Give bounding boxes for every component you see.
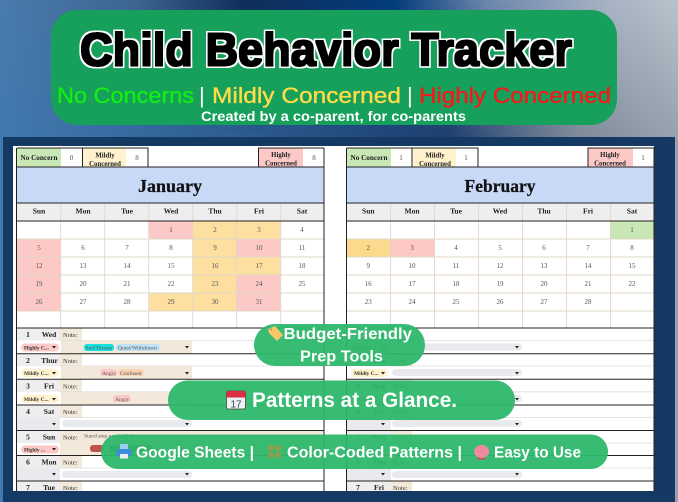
concern level legend: No Concerns [57, 83, 194, 108]
February daily log: 5 [356, 432, 360, 442]
January legend: No Concern [20, 155, 58, 162]
January daily log: Sun [43, 432, 56, 442]
subtitle: Created by a co-parent, for co-parents [201, 108, 466, 124]
icon: calendar [226, 391, 246, 410]
January legend: Mildly [95, 152, 115, 160]
February day grid: 7 [586, 244, 590, 252]
January legend: 8 [312, 154, 316, 162]
January weekday header [17, 203, 324, 221]
status chips: Mildly C... [354, 371, 379, 377]
January daily log: 1 [26, 330, 30, 339]
January legend [17, 148, 324, 168]
February daily log: Note: [393, 434, 408, 442]
January daily log: Mon [42, 458, 57, 466]
behavior tags: Angry [115, 397, 129, 403]
January day grid: 12 [36, 262, 43, 270]
status chips: Highly ... [24, 448, 46, 454]
February daily log: 6 [356, 458, 360, 466]
status chips: Mildly C... [354, 397, 379, 403]
February daily log: Note: [393, 460, 408, 466]
January day grid: 15 [168, 262, 175, 270]
January legend: 0 [70, 154, 74, 162]
callout text: Easy to Use [494, 444, 581, 462]
callout text [136, 444, 581, 462]
February day grid: 19 [496, 280, 504, 288]
February day grid [347, 203, 654, 328]
February daily log: Sun [373, 356, 386, 365]
February day grid: 3 [410, 244, 414, 252]
January day grid: 24 [256, 280, 263, 288]
January day grid: 13 [80, 262, 87, 270]
January day grid: 28 [124, 298, 131, 306]
January day grid: 19 [36, 280, 43, 288]
January day grid: 26 [36, 298, 43, 306]
February legend: Concerned [419, 161, 451, 168]
February day grid: 21 [584, 280, 592, 288]
January day grid: 25 [298, 280, 306, 288]
January day grid: 23 [212, 280, 219, 288]
February daily log: Sat [374, 330, 385, 339]
January day grid: 3 [257, 226, 261, 234]
January heading [17, 167, 324, 203]
January day grid: 7 [125, 244, 129, 252]
February weekday header: Wed [493, 206, 508, 216]
January daily log: Note: [63, 384, 78, 390]
callout: patterns at a glance [168, 380, 515, 420]
January weekday header: Tue [121, 206, 134, 216]
January day grid: 18 [298, 262, 306, 270]
icon: printer [116, 444, 132, 458]
February daily log: Note: [393, 485, 408, 492]
February daily log: 7 [356, 483, 360, 492]
January daily log: Note: [63, 358, 78, 365]
January day grid: 22 [168, 280, 175, 288]
status chips: Mildly C... [24, 397, 49, 403]
January daily log: 7 [26, 483, 30, 492]
panel: January calendar [16, 148, 324, 492]
January daily log: 2 [26, 356, 30, 365]
January legend: Concerned [265, 160, 297, 168]
February weekday header: Sun [362, 206, 375, 216]
January day grid: 17 [256, 262, 263, 270]
January day grid: 29 [168, 298, 175, 306]
status chips: Highly C... [24, 346, 50, 352]
February legend [346, 148, 654, 168]
February daily log: 3 [356, 382, 360, 390]
behavior tags: Quiet/Withdrawn [118, 346, 157, 352]
February day grid: 8 [630, 244, 634, 252]
January daily log [17, 328, 324, 492]
February legend: 1 [464, 154, 468, 162]
title banner [51, 10, 617, 125]
February day grid: 25 [452, 298, 460, 306]
January day grid: 27 [80, 298, 87, 306]
February daily log: Note: [393, 332, 408, 339]
February day grid: 22 [628, 280, 636, 288]
February day grid: 5 [498, 244, 502, 252]
February daily log: 1 [356, 330, 360, 339]
January daily log: Sat [44, 407, 55, 416]
January weekday header: Thu [208, 206, 222, 216]
February daily log [347, 328, 654, 492]
January day grid: 16 [212, 262, 219, 270]
February day grid: 10 [408, 262, 416, 270]
February daily log: Mon [372, 382, 387, 390]
February day grid: 6 [542, 244, 546, 252]
February day grid: 14 [584, 262, 592, 270]
February weekday header: Thu [537, 206, 551, 216]
January daily log: 5 [26, 432, 30, 442]
behavior tags: Angry [102, 371, 116, 377]
concern level legend: Highly Concerned [419, 83, 611, 108]
title: Child Behavior Tracker [80, 24, 572, 76]
January frame [16, 148, 324, 491]
panel: navy backdrop [3, 137, 675, 502]
January legend: 8 [135, 154, 139, 162]
January day grid [17, 203, 324, 328]
February daily log: Tue [373, 407, 386, 416]
February heading [347, 167, 654, 203]
callout text: Prep Tools [300, 348, 383, 366]
January daily log: Wed [42, 330, 57, 339]
February daily log: Note: [393, 384, 408, 390]
January legend: Concerned [89, 161, 121, 168]
January day grid: 5 [37, 244, 41, 252]
concern level legend: Mildly Concerned [212, 83, 401, 108]
January day grid: 10 [256, 244, 263, 252]
February day grid: 28 [584, 298, 592, 306]
January day grid: 8 [169, 244, 173, 252]
February day grid: 23 [365, 298, 372, 306]
panel: February calendar [346, 148, 654, 492]
callout: budget-friendly prep tools [254, 324, 425, 366]
January daily log: 3 [26, 382, 30, 390]
February legend: Highly [600, 152, 620, 159]
concern level legend: | [199, 83, 205, 108]
February day grid: 2 [367, 244, 371, 252]
February legend: No Concern [350, 155, 388, 162]
February day grid: 13 [540, 262, 548, 270]
January daily log: 6 [26, 458, 30, 466]
January day grid: 30 [212, 298, 219, 306]
January weekday header: Mon [76, 206, 91, 216]
February weekday header: Fri [583, 206, 593, 216]
callout text: Budget-Friendly [284, 326, 412, 343]
January daily log: Note: [63, 332, 78, 339]
February heading: February [465, 176, 536, 196]
January daily log: Note: [63, 485, 78, 492]
callout: feature list [101, 434, 608, 469]
status chips [351, 344, 519, 476]
February day grid: 11 [453, 262, 460, 270]
January weekday header: Sun [33, 206, 46, 216]
behavior tags [84, 344, 160, 452]
February legend: Mildly [425, 152, 445, 160]
January day grid: 1 [169, 226, 173, 234]
callout text: Google Sheets | [136, 444, 254, 462]
January day grid: 4 [300, 226, 304, 234]
January daily log: 4 [26, 407, 30, 416]
February daily log: 4 [356, 407, 360, 416]
January day grid: 9 [213, 244, 217, 252]
January daily log: Note: [63, 434, 78, 442]
icon: brain [474, 445, 489, 460]
February daily log: Wed [372, 432, 387, 442]
February weekday header: Tue [450, 206, 463, 216]
January legend: Highly [271, 152, 291, 159]
February daily log: Note: [393, 409, 408, 416]
February day grid: 24 [408, 298, 416, 306]
January heading: January [138, 176, 202, 196]
February day grid: 9 [367, 262, 371, 270]
January daily log: Tue [43, 483, 56, 492]
January day grid: 20 [80, 280, 87, 288]
February day grid: 1 [630, 226, 634, 234]
January day grid: 6 [81, 244, 85, 252]
February day grid: 20 [540, 280, 548, 288]
February legend: 1 [641, 154, 645, 162]
callout text: Patterns at a Glance. [252, 389, 457, 412]
January day grid: 11 [299, 244, 306, 252]
icon: clover [268, 445, 281, 458]
February day grid: 16 [365, 280, 372, 288]
icon: calendar: 17 [230, 400, 242, 410]
January daily log: Thur [41, 356, 59, 365]
status chips: Mildly C... [24, 371, 49, 377]
February day grid: 17 [408, 280, 416, 288]
February daily log: 2 [356, 356, 360, 365]
February day grid: 15 [628, 262, 636, 270]
concern level legend [57, 83, 611, 108]
January day grid: 14 [124, 262, 131, 270]
behavior tags: Confused [120, 370, 142, 377]
February day grid: 27 [540, 298, 548, 306]
February day grid: 4 [454, 244, 458, 252]
February weekday header [347, 203, 654, 221]
January weekday header: Wed [164, 206, 179, 216]
January daily log: Note: [63, 460, 78, 466]
February weekday header: Mon [404, 206, 420, 216]
callout text [284, 326, 412, 366]
behavior tags: Sad/Threats [86, 346, 112, 352]
January daily log: Stand step parent hit her [84, 434, 139, 440]
icon: price tag [268, 326, 283, 341]
January daily log: Note: [63, 409, 78, 416]
February daily log: Thu [372, 458, 386, 466]
January day grid: 21 [124, 280, 131, 288]
February weekday header: Sat [627, 206, 638, 216]
February day grid: 12 [496, 262, 504, 270]
January day grid: 2 [213, 226, 217, 234]
concern level legend: | [407, 83, 413, 108]
status chips: No Con... [354, 346, 376, 352]
February day grid: 18 [452, 280, 460, 288]
status chips [21, 344, 189, 476]
January weekday header: Sat [297, 206, 308, 216]
February daily log: Note: [393, 358, 408, 365]
January daily log: Fri [44, 382, 54, 390]
January weekday header: Fri [254, 206, 264, 216]
February day grid: 26 [496, 298, 504, 306]
February frame [346, 148, 654, 491]
February legend: 1 [399, 154, 403, 162]
February daily log: Fri [374, 483, 384, 492]
callout text: Color-Coded Patterns | [287, 444, 462, 462]
January day grid: 31 [256, 298, 263, 306]
panel: spreadsheet page [13, 146, 654, 492]
February legend: Concerned [594, 160, 626, 168]
